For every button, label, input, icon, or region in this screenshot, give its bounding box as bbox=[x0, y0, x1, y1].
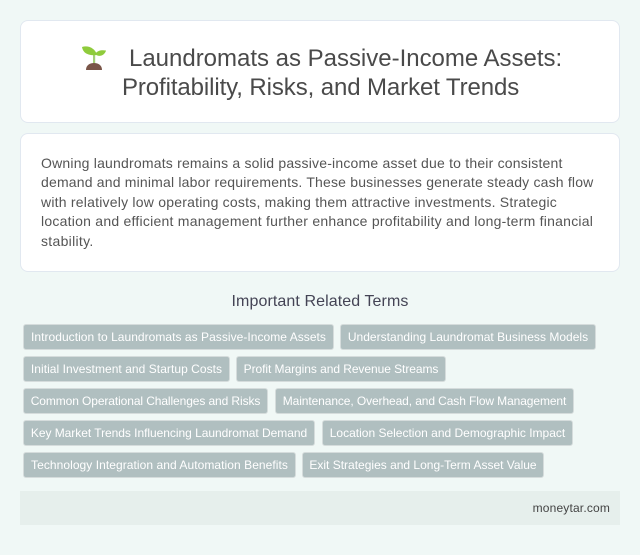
heading: important related terms: Important Related Terms bbox=[232, 293, 408, 310]
heading line 1: Laundromats as Passive-Income Assets: bbox=[129, 45, 562, 72]
heading line 2: Profitability, Risks, and Market Trends bbox=[122, 74, 519, 101]
panel: related term chips bbox=[23, 324, 596, 478]
chip: Technology Integration and Automation Benefits bbox=[31, 458, 288, 472]
icon: seedling bbox=[82, 46, 106, 70]
chip: Location Selection and Demographic Impact bbox=[330, 426, 565, 440]
footer bar bbox=[20, 491, 620, 525]
chip bbox=[275, 388, 574, 414]
chip bbox=[23, 452, 296, 478]
summary text: Owning laundromats remains a solid passive-income asset due to their consistent bbox=[41, 155, 563, 171]
chip: Key Market Trends Influencing Laundromat Demand bbox=[31, 426, 307, 440]
summary text bbox=[41, 155, 594, 249]
chip bbox=[340, 324, 596, 350]
chip: Introduction to Laundromats as Passive-Income Assets bbox=[31, 330, 326, 344]
summary text: demand and minimal labor requirements. These businesses generate steady cash flow bbox=[41, 174, 593, 190]
chip bbox=[23, 388, 268, 414]
footer site name: moneytar.com bbox=[533, 501, 610, 515]
panel: summary card bbox=[20, 133, 620, 272]
chip: Maintenance, Overhead, and Cash Flow Management bbox=[283, 394, 566, 408]
chip bbox=[23, 420, 315, 446]
chip bbox=[236, 356, 446, 382]
chip bbox=[322, 420, 573, 446]
chip bbox=[23, 356, 230, 382]
panel: title card bbox=[20, 20, 620, 123]
summary text: stability. bbox=[41, 233, 94, 249]
summary text: with relatively low operating costs, making them attractive investments. Strategic bbox=[41, 194, 557, 210]
chip: Exit Strategies and Long-Term Asset Value bbox=[309, 458, 537, 472]
chip: Profit Margins and Revenue Streams bbox=[244, 362, 438, 376]
chip: Common Operational Challenges and Risks bbox=[31, 394, 260, 408]
summary text: location and efficient management further enhance profitability and long-term financial bbox=[41, 213, 593, 229]
chip: Understanding Laundromat Business Models bbox=[348, 330, 588, 344]
chip bbox=[23, 324, 334, 350]
chip bbox=[302, 452, 544, 478]
chip: Initial Investment and Startup Costs bbox=[31, 362, 222, 376]
